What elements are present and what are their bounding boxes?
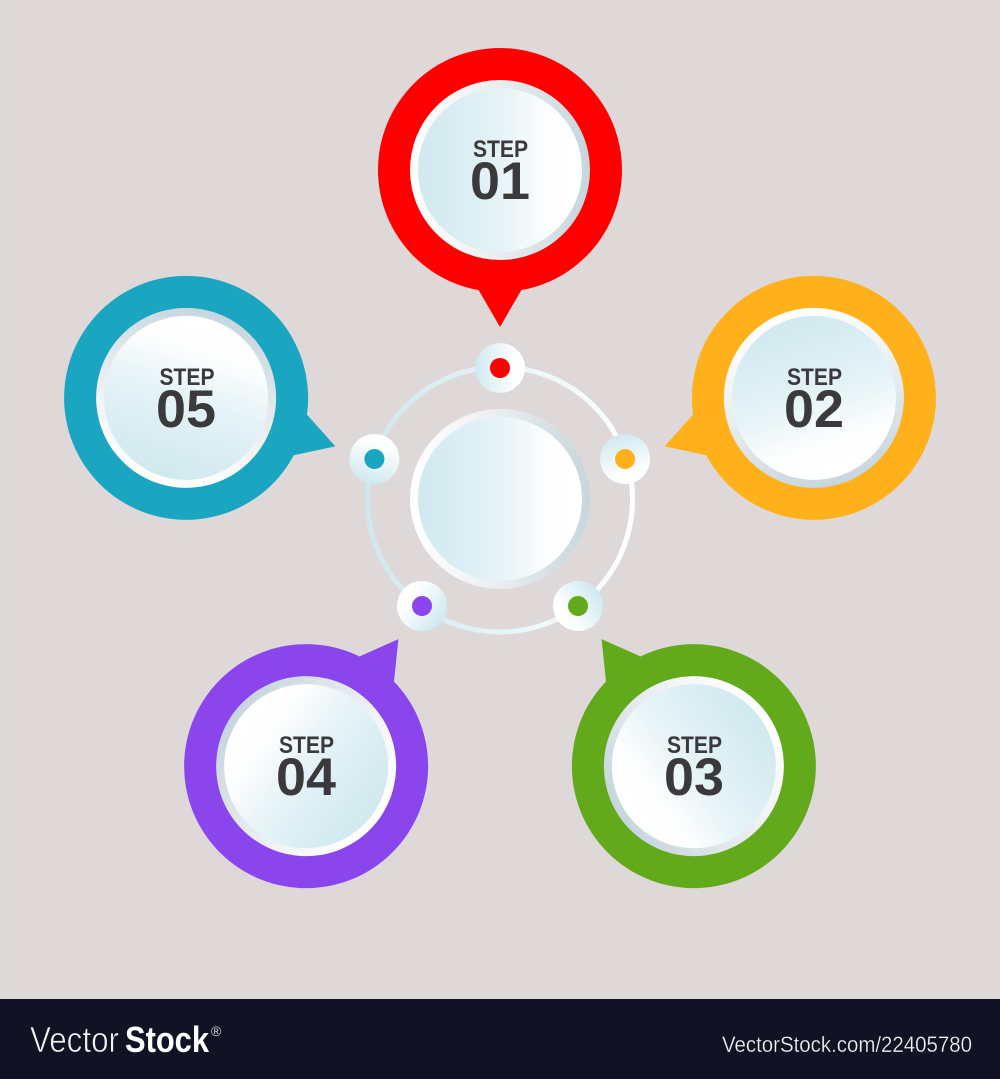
orbit ring: [368, 367, 632, 632]
step 04 panel: [136, 567, 497, 937]
step 01 label: STEP: [473, 136, 528, 163]
logo: VectorStock: Stock: [125, 1019, 210, 1060]
step 02 number: 02: [784, 380, 844, 439]
step 05 label: STEP: [160, 364, 214, 391]
step 04 label: STEP: [279, 732, 334, 759]
step 03 panel: [503, 567, 864, 937]
logo: VectorStock: Vector: [30, 1019, 119, 1060]
footer banner: [0, 999, 1000, 1079]
node: green: [543, 571, 613, 641]
node: purple: [387, 571, 457, 641]
step 03 pin: [503, 567, 864, 937]
step 01 panel: [378, 48, 622, 327]
step 04 pin: [136, 567, 497, 937]
step 01 pin: [378, 48, 622, 327]
step 05 number: 05: [156, 380, 216, 439]
step 02 pin: [627, 244, 968, 562]
step 04 number: 04: [276, 748, 337, 807]
node: red: [475, 343, 525, 393]
step 03 number: 03: [664, 748, 724, 807]
image id text: VectorStock.com/22405780: [722, 1032, 972, 1057]
node: amber: [594, 428, 657, 491]
logo: VectorStock: [30, 1019, 222, 1060]
step 05 pin: [32, 244, 373, 562]
central circle: [410, 409, 590, 589]
step 05 panel: [32, 244, 373, 562]
step 03 label: STEP: [667, 732, 722, 759]
step 02 panel: [627, 244, 968, 562]
step 01 number: 01: [470, 152, 530, 211]
node: teal: [343, 428, 406, 491]
step 02 label: STEP: [787, 364, 842, 391]
logo: VectorStock: ®: [211, 1023, 222, 1039]
